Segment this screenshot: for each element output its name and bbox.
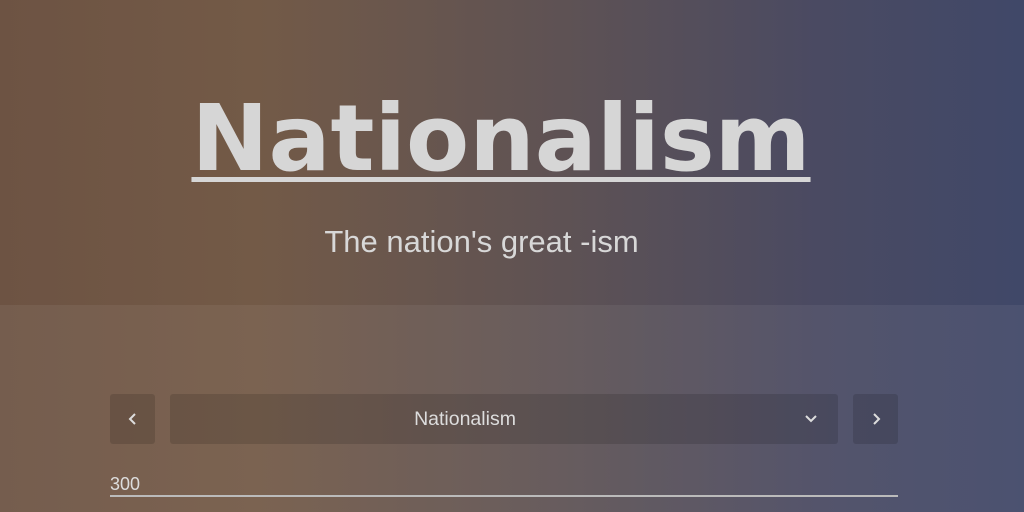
icon: chevron down xyxy=(805,415,817,422)
title: Nationalism xyxy=(191,85,811,192)
dropdown: selection xyxy=(170,394,838,444)
button: previous xyxy=(110,394,155,444)
subtitle: The nation's great -ism xyxy=(324,224,639,259)
input value: 300 xyxy=(110,474,140,494)
button: next xyxy=(853,394,898,444)
dropdown: selection: Nationalism xyxy=(414,408,516,430)
